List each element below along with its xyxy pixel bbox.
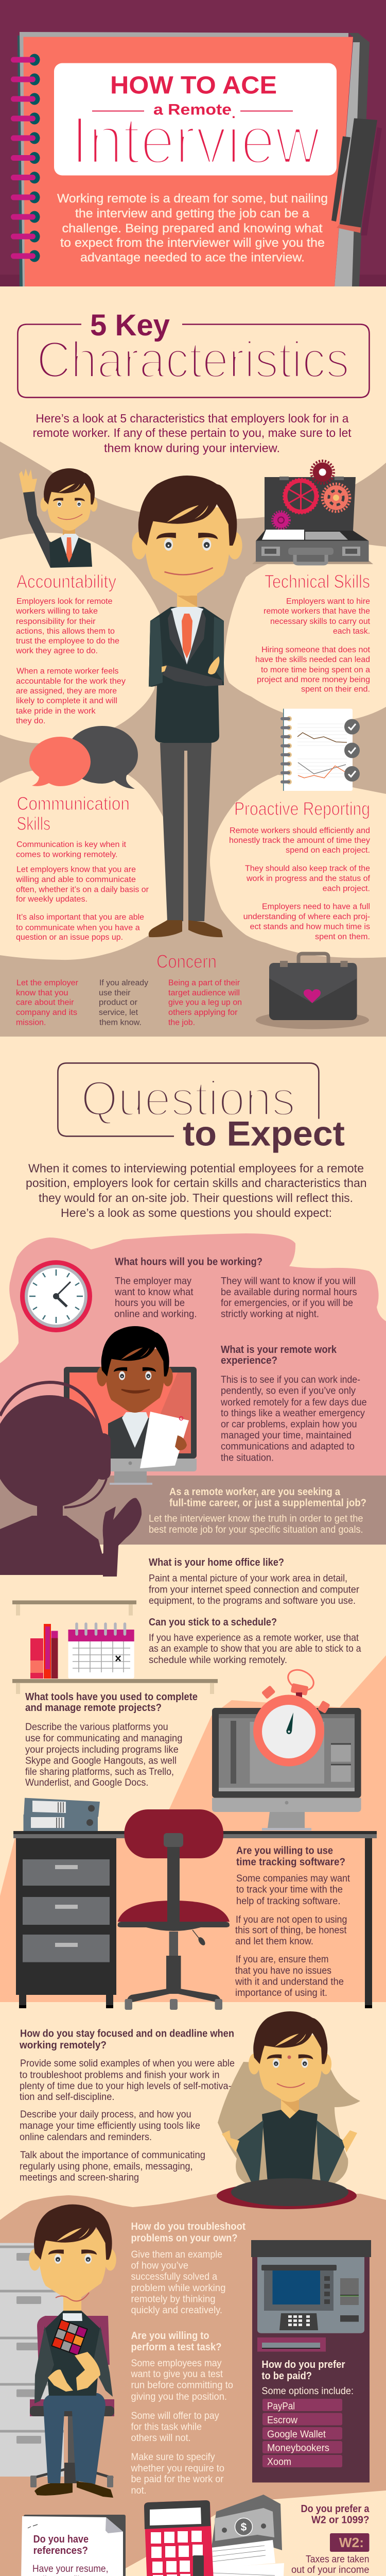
column 1: company and its (16, 1008, 77, 1017)
question: working hours: want to know what (114, 1287, 194, 1298)
question: test task: want to give you a test (131, 2369, 223, 2380)
question: time tracking: Some companies may want (236, 1873, 350, 1884)
payment options list: Moneybookers (267, 2443, 329, 2453)
question: time tracking: this sort of thing, be honest (235, 1925, 347, 1936)
communication skills text: comes to working remotely. (16, 850, 118, 859)
question: staying focused: Describe your daily process, and how you (20, 2109, 191, 2120)
question: stick to schedule: Can you stick to a schedule? (149, 1617, 277, 1628)
question: home office: equipment, to the programs and software you use. (149, 1596, 356, 1606)
question: staying focused (19, 2028, 235, 2183)
intro text: Working remote is a dream for some, but nailing (57, 192, 328, 206)
question: tools (25, 1691, 198, 1788)
question: tools: Skype and Google Hangouts, as well (25, 1756, 177, 1766)
concern heading: Concern (156, 951, 217, 972)
icon: desktop computer (212, 1708, 361, 1831)
question: remote work experience: communications and adapted to (221, 1442, 355, 1452)
question: working hours: hours you will be (115, 1298, 185, 1309)
communication skills text: Communication is key when it (16, 840, 127, 849)
column 3 (168, 979, 242, 1027)
accountability text: are assigned, they are more (16, 687, 117, 696)
technical skills text: Hiring someone that does not (261, 646, 371, 654)
heading: questions to expect: Questions (81, 1071, 295, 1126)
column 1: know that you (16, 989, 68, 997)
question: remote work experience (220, 1344, 367, 1464)
question: stick to schedule: If you have experience as a remote worker, use that (149, 1633, 359, 1643)
question: staying focused: tion and self-discipline. (20, 2092, 114, 2103)
legs and shoes (43, 2393, 106, 2484)
accountability text: trust the employee to do the (16, 637, 119, 646)
question: test task: for this task while (131, 2422, 202, 2433)
icon: briefcase with gears (252, 461, 373, 564)
question: test task: Some will offer to pay (131, 2411, 219, 2421)
notebook spiral rings (11, 54, 40, 262)
torso (63, 2295, 81, 2311)
question: working hours: They will want to know if you will (221, 1276, 356, 1287)
callout: full-time or supplemental: best remote job for your specific situation and goals. (149, 1524, 363, 1535)
accountability text: work they agree to do. (15, 647, 98, 655)
question: remote work experience: to things like a weather emergency (221, 1408, 365, 1419)
questions intro text: When it comes to interviewing potential employees for a remote (28, 1161, 364, 1175)
books (30, 1624, 58, 1679)
question: troubleshoot: problems on your own? (131, 2233, 238, 2244)
concern text columns (16, 979, 242, 1027)
panel: tan wave background (0, 442, 386, 1037)
column 2: product or (99, 998, 137, 1007)
question: staying focused: Talk about the importance of communicating (20, 2150, 205, 2161)
questions intro text: Here’s a look as some questions you should expect: (61, 1206, 332, 1219)
icon: filing cabinets (0, 2243, 64, 2477)
accountability text: likely to complete it and will (16, 697, 117, 705)
column 3: the job. (168, 1018, 195, 1027)
icon: binders (24, 1798, 100, 1831)
proactive reporting text: honestly track the amount of time they (229, 836, 370, 845)
payment options list: Google Wallet (267, 2429, 326, 2440)
accountability heading: Accountability (16, 571, 116, 592)
question: test task (131, 2330, 233, 2496)
intro text: challenge. Being prepared and knowing what (62, 222, 323, 235)
icon: computer monitor with interviewer (64, 1326, 197, 1485)
proactive reporting text: ect stands and how much time is (250, 922, 370, 931)
icon: desk with drawers (13, 1831, 377, 2008)
question: test task: giving you the position. (131, 2392, 227, 2402)
question: troubleshoot: of how you’ve (131, 2260, 188, 2271)
icon: briefcase with heart (256, 954, 369, 1029)
question: troubleshoot: problem while working (131, 2283, 225, 2294)
question: tools: and manage remote projects? (25, 1702, 162, 1714)
character: central man (132, 476, 242, 937)
question: W2 or 1099: Do you prefer a (301, 2503, 370, 2515)
communication skills text: willing and able to communicate (15, 875, 136, 884)
panel: pink blob (0, 1233, 386, 1476)
question: working hours (114, 1257, 357, 1320)
panel: proactive reporting blob (210, 775, 386, 958)
question: tools: your projects including programs like (25, 1744, 179, 1755)
question: test task: run before committing to (131, 2380, 233, 2391)
question: remote work experience: pendently, so even if you’ve only (221, 1386, 356, 1397)
technical skills text (255, 597, 371, 693)
technical skills text: necessary skills to carry out (270, 617, 371, 626)
question: staying focused: plenty of time due to your high levels of self-motiva- (20, 2081, 232, 2092)
accountability text: workers willing to take (15, 607, 98, 616)
heading: 5 key characteristics: 5 Key (90, 309, 170, 342)
question: home office: from your internet speed connection and computer (149, 1585, 360, 1596)
proactive reporting text: understanding of where each proj- (243, 912, 370, 921)
check marks (344, 719, 360, 782)
spiral binding (280, 716, 292, 785)
heading: questions to expect: to Expect (183, 1114, 345, 1154)
question: remote work experience: managed your time, maintained (221, 1430, 352, 1441)
heading: 5 key characteristics: Characteristics (37, 331, 349, 388)
jacket (149, 607, 224, 743)
question: remote work experience: worked remotely for a few days due (220, 1397, 367, 1408)
payment options list: Escrow (267, 2415, 297, 2426)
question: working hours: What hours will you be working? (115, 1257, 262, 1268)
question: working hours: be available during normal hours (221, 1287, 357, 1298)
crossed arms (163, 665, 222, 686)
callout: full-time or supplemental (149, 1486, 366, 1535)
question: troubleshoot: successfully solved a (131, 2272, 217, 2282)
technical skills text: remote workers that have the (264, 607, 370, 616)
question: time tracking: with it and understand the (235, 1977, 344, 1988)
question: W2 or 1099: Taxes are taken (306, 2554, 370, 2565)
question: working hours: The employer may (115, 1276, 191, 1287)
question: troubleshoot: quickly and creatively. (131, 2305, 222, 2316)
question: time tracking: help of tracking software. (236, 1896, 341, 1907)
question: W2 or 1099: W2 or 1099? (311, 2514, 370, 2526)
icon: silhouette with headset (0, 1382, 142, 1577)
question: remote work experience: the situation. (221, 1453, 274, 1464)
callout: full-time or supplemental: full-time career, or just a supplemental job? (169, 1498, 366, 1509)
proactive reporting text: each project. (323, 885, 370, 893)
communication skills text: for weekly updates. (16, 895, 87, 904)
communication skills heading: Skills (16, 813, 50, 834)
question: remote work experience: This is to see if you can work inde- (221, 1375, 360, 1385)
question: tools: Describe the various platforms you (25, 1722, 168, 1733)
question: test task: Some employees may (131, 2358, 222, 2369)
characteristics intro text: them know during your interview. (104, 442, 280, 455)
question: test task: Are you willing to (131, 2330, 209, 2342)
panel: taupe band (0, 1476, 386, 1545)
question: W2 or 1099: out of your income (291, 2565, 370, 2575)
communication skills heading (16, 793, 130, 834)
proactive reporting text: They should also keep track of the (245, 865, 370, 873)
title: HOW TO ACE (110, 72, 277, 99)
accountability text (15, 597, 126, 725)
panel: references document (20, 2515, 126, 2576)
panel: salmon tan blob (0, 2194, 386, 2576)
accountability text: take pride in the work (16, 707, 96, 716)
panel: ATM (251, 2240, 371, 2482)
heading: questions to expect (58, 1063, 345, 1154)
icon: shelves with books and calendar (12, 1600, 218, 1694)
technical skills text: to more time being spent on a (261, 666, 370, 674)
panel: communication blob (0, 771, 170, 960)
proactive reporting text: Remote workers should efficiently and (230, 826, 370, 835)
accountability text: responsibility for their (16, 617, 96, 626)
icon: speech bubbles (29, 726, 138, 789)
accountability text: accountable for the work they (16, 677, 126, 686)
communication skills text: question or an issue pops up. (16, 933, 123, 942)
character: accountability man waving (19, 468, 97, 568)
question: troubleshoot: How do you troubleshoot (131, 2221, 245, 2232)
column 2: them know. (99, 1018, 142, 1027)
communication skills text: often, whether it’s on a daily basis or (16, 886, 149, 894)
question: time tracking: time tracking software? (236, 1857, 345, 1868)
question: prefer to be paid: How do you prefer (261, 2359, 345, 2370)
icon: calculator (144, 2500, 214, 2576)
question: remote work experience: or car problems, explain how you (221, 1419, 357, 1430)
question: W2 or 1099 (174, 2503, 370, 2576)
title (54, 63, 337, 178)
column 3: Being a part of their (168, 979, 240, 987)
intro text: the interview and getting the job can be a (75, 207, 310, 221)
column 2 (99, 979, 148, 1027)
references text: Have your resume, (32, 2564, 108, 2574)
question: time tracking: Are you willing to use (236, 1845, 333, 1857)
accountability text: they do. (16, 717, 45, 725)
payment options list: Xoom (267, 2457, 291, 2468)
payment options list: PayPal (267, 2401, 295, 2412)
column 3: target audience will (168, 989, 240, 997)
question: time tracking: importance of using it. (235, 1988, 327, 1998)
proactive reporting text: spend on each project. (286, 846, 370, 855)
panel: technical skills blob (224, 541, 386, 721)
characteristics intro text (33, 412, 352, 455)
question: staying focused: manage your time efficiently using tools like (20, 2121, 200, 2131)
column 2: service, let (99, 1008, 138, 1017)
payment options list (262, 2399, 342, 2468)
question: W2 or 1099: W2: (339, 2535, 364, 2550)
callout: full-time or supplemental: As a remote worker, are you seeking a (169, 1486, 341, 1498)
question: staying focused: regularly using phone, emails, messaging, (20, 2161, 192, 2172)
question: working hours: online and working. (114, 1309, 197, 1320)
question: staying focused: working remotely? (19, 2040, 107, 2051)
panel: peach background (0, 1655, 386, 2002)
question: staying focused: to troubleshoot problems and finish your work in (20, 2070, 220, 2080)
technical skills text: spent on their end. (301, 685, 370, 693)
question: troubleshoot (131, 2221, 245, 2316)
technical skills text: have the skills needed can lead (255, 655, 370, 664)
question: troubleshoot: Give them an example (131, 2249, 222, 2260)
question: staying focused: online calendars and reminders. (20, 2132, 152, 2143)
technical skills text: project and more money being (257, 675, 370, 684)
question: troubleshoot: remotely by thinking (131, 2294, 215, 2304)
question: remote work experience: What is your remote work (221, 1344, 337, 1355)
column 2: If you already (99, 979, 148, 987)
question: time tracking: to track your time with the (236, 1885, 343, 1895)
question: test task: perform a test task? (131, 2342, 221, 2353)
title: Interview (71, 102, 321, 178)
accountability text: Employers look for remote (16, 597, 112, 606)
question: test task: not. (131, 2485, 147, 2496)
calendar (68, 1624, 134, 1679)
icon: bills and receipts: $ (241, 2521, 247, 2533)
panel: references document: references? (33, 2545, 88, 2556)
panel: notebook header (0, 0, 386, 286)
question: tools: file sharing platforms, such as Trello, (25, 1767, 174, 1777)
icon: office chair (118, 1809, 230, 2010)
chair (30, 2316, 114, 2487)
question: working hours: strictly working at night. (221, 1309, 319, 1320)
communication skills text: to communicate when you have a (16, 923, 140, 933)
question: staying focused: How do you stay focused and on deadline when (20, 2028, 234, 2040)
question: test task: be paid for the work or (131, 2474, 224, 2485)
panel: accountability blob (0, 533, 163, 743)
technical skills text: each task. (333, 627, 370, 636)
proactive reporting text (229, 826, 371, 941)
questions intro text: position, employers look for certain skills and characteristics than (26, 1176, 367, 1190)
column 1: care about their (16, 998, 74, 1007)
question: home office: What is your home office like? (149, 1557, 284, 1568)
question: test task: whether you require to (131, 2463, 224, 2474)
column 1: Let the employer (16, 979, 78, 987)
character: meditating man (217, 2011, 360, 2209)
gears (272, 461, 350, 529)
proactive reporting text: spent on them. (315, 933, 370, 941)
callout: full-time or supplemental: Let the interviewer know the truth in order to get the (149, 1514, 363, 1524)
technical skills text: Employers want to hire (286, 597, 370, 606)
question: prefer to be paid: Some options include: (261, 2386, 354, 2397)
question: stick to schedule: as an example to show that you are able to stick to a (149, 1643, 361, 1654)
question: staying focused: meetings and screen-sharing (20, 2173, 139, 2183)
question: tools: use for communicating and managing (25, 1733, 182, 1744)
question: time tracking: that you have no issues (235, 1965, 331, 1976)
heading: 5 key characteristics (17, 309, 369, 397)
proactive reporting text: work in progress and the status of (246, 874, 371, 883)
trousers (160, 743, 212, 921)
intro text: to expect from the interviewer will give you the (60, 236, 325, 250)
icon: clock (20, 1260, 92, 1332)
column 1: mission. (16, 1018, 46, 1027)
question: stick to schedule (149, 1617, 361, 1666)
question: time tracking: If you are not open to using (236, 1914, 347, 1925)
icon: report notepad (280, 709, 360, 791)
question: time tracking: If you are, ensure them (236, 1954, 328, 1965)
question: prefer to be paid (261, 2359, 354, 2468)
communication skills text: It’s also important that you are able (16, 913, 144, 922)
communication skills text (15, 840, 149, 942)
shoes (149, 920, 223, 937)
characteristics intro text: Here’s a look at 5 characteristics that employers look for in a (36, 412, 349, 425)
icon: stopwatch (253, 1666, 330, 1766)
column 3: give you a leg up on (168, 998, 242, 1007)
question: time tracking: and let them know. (235, 1936, 313, 1947)
icon: bills and receipts (197, 2495, 284, 2576)
question: test task: Make sure to specify (131, 2452, 215, 2463)
question: working hours: for emergencies, or if you will be (221, 1298, 353, 1309)
questions intro text: they would for an on-site job. Their questions will reflect this. (39, 1191, 353, 1205)
column 2: use their (99, 989, 131, 997)
question: home office: Paint a mental picture of your work area in detail, (149, 1573, 347, 1584)
icon: pen (331, 118, 382, 235)
question: stick to schedule: schedule while working remotely. (149, 1655, 287, 1666)
question: test task: others will not. (131, 2433, 191, 2444)
question: prefer to be paid: to be paid? (261, 2370, 312, 2382)
intro text (57, 192, 328, 265)
communication skills text: Let employers know that you are (16, 866, 136, 874)
panel: references document: Do you have (33, 2534, 89, 2545)
question: staying focused: Provide some solid examples of when you were able (20, 2058, 235, 2069)
accountability text: actions, this allows them to (16, 627, 115, 636)
column 1 (16, 979, 78, 1027)
question: tools: What tools have you used to complete (25, 1691, 198, 1703)
questions intro text (26, 1161, 367, 1219)
question: time tracking (235, 1845, 350, 1998)
question: remote work experience: experience? (221, 1355, 277, 1366)
proactive reporting text: Employers need to have a full (262, 903, 370, 911)
character: man solving cube (29, 2205, 116, 2498)
title: a Remote (153, 101, 232, 118)
question: home office (149, 1557, 360, 1606)
rubik cube (51, 2319, 88, 2356)
communication skills heading: Communication (16, 793, 130, 814)
question: tools: Wunderlist, and Google Docs. (25, 1777, 148, 1788)
intro text: advantage needed to ace the interview. (80, 251, 305, 265)
characteristics intro text: remote worker. If any of these pertain to you, make sure to let (33, 426, 352, 439)
accountability text: When a remote worker feels (16, 667, 119, 676)
column 3: others applying for (168, 1008, 238, 1017)
